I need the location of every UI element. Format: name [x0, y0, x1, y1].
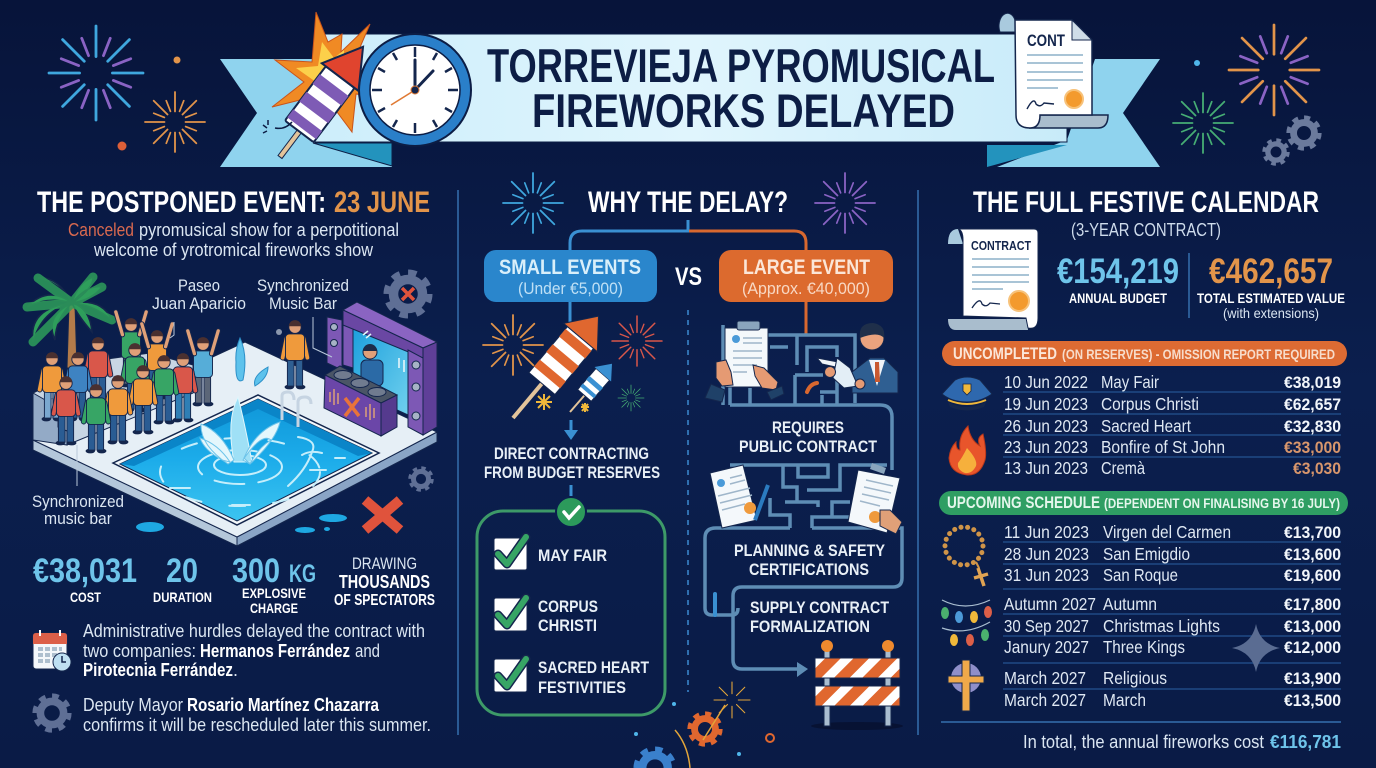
row: sacred heart: 26 Jun 2023 [1004, 416, 1088, 436]
row: san roque: 31 Jun 2023 [1004, 565, 1089, 585]
labels: Juan Aparicio [152, 294, 246, 313]
icon: clipboard with hands [705, 321, 784, 402]
sparkle [1232, 624, 1280, 672]
panel: festive calendar [939, 186, 1348, 752]
row: san roque [1004, 565, 1341, 585]
total line: €116,781 [1270, 732, 1341, 752]
item: corpus christi [494, 597, 598, 635]
row: bonfire: Bonfire of St John [1101, 437, 1225, 457]
icon: police cap [942, 377, 992, 410]
DJ booth [324, 302, 437, 436]
heading: postponed event: THE POSTPONED EVENT: [37, 186, 326, 219]
row: three kings: €12,000 [1284, 638, 1341, 657]
text: administrative hurdles: and [355, 641, 380, 661]
row: corpus christi: Corpus Christi [1101, 394, 1199, 414]
item: may fair [494, 537, 607, 570]
row: christmas lights [1004, 616, 1341, 636]
text: deputy mayor: Rosario Martínez Chazarra [187, 695, 380, 715]
text: supply contract: SUPPLY CONTRACT [750, 598, 890, 617]
row: virgen del carmen: 11 Jun 2023 [1004, 522, 1089, 542]
row: march: €13,500 [1284, 691, 1341, 710]
stats row: 20 [166, 552, 198, 590]
row: autumn [1004, 594, 1341, 614]
subheading: pyromusical show for a perpotitional [139, 220, 399, 240]
banner: upcoming: UPCOMING SCHEDULE [947, 493, 1100, 512]
icon: rosary [945, 527, 988, 586]
row: virgen del carmen: Virgen del Carmen [1103, 522, 1231, 542]
decoration: bottom gears and sparks [634, 682, 774, 768]
item: corpus christi: CHRISTI [538, 616, 597, 635]
singer [276, 320, 307, 389]
icon: contract document: CONTRACT [971, 238, 1031, 253]
row: crema: 13 Jun 2023 [1004, 458, 1088, 478]
table: upcoming schedule [1003, 522, 1341, 710]
row: crema [1004, 458, 1341, 478]
text: requires public contract [739, 418, 878, 456]
item: sacred heart: SACRED HEART [538, 658, 650, 677]
small events box [484, 250, 657, 302]
stat: total value: €462,657 [1209, 252, 1333, 291]
text: planning and safety: CERTIFICATIONS [749, 560, 869, 579]
text: direct contracting [484, 445, 660, 482]
small events box: SMALL EVENTS [499, 256, 641, 279]
row: autumn: Autumn [1103, 594, 1157, 614]
banner: upcoming: (DEPENDENT ON FINALISING BY 16 JULY) [1104, 496, 1340, 511]
row: may fair [1004, 372, 1341, 392]
text: deputy mayor: Deputy Mayor [83, 695, 183, 715]
stats row: OF SPECTATORS [334, 592, 435, 609]
row: autumn: €17,800 [1284, 595, 1341, 614]
heading: why the delay: WHY THE DELAY? [588, 186, 788, 219]
icon: cross [948, 660, 984, 711]
labels: music bar [44, 509, 112, 528]
swimming pool [113, 338, 379, 525]
row: three kings: Janury 2027 [1004, 637, 1089, 657]
stats row: €38,031 [33, 552, 137, 590]
labels: Synchronized [257, 276, 349, 295]
text: direct contracting: DIRECT CONTRACTING [494, 445, 649, 463]
banner: uncompleted: UNCOMPLETED [953, 344, 1057, 363]
text: requires public contract: PUBLIC CONTRACT [739, 437, 878, 456]
row: three kings: Three Kings [1103, 637, 1185, 657]
text: supply contract [750, 598, 890, 636]
large event box: (Approx. €40,000) [742, 279, 870, 298]
item: may fair: MAY FAIR [538, 546, 607, 565]
icon: string lights [941, 600, 992, 646]
row: sacred heart: Sacred Heart [1101, 416, 1191, 436]
crowd [40, 312, 218, 453]
item: sacred heart: FESTIVITIES [538, 678, 626, 697]
icon: road barrier [811, 640, 903, 730]
stepped seating [33, 353, 193, 445]
text: administrative hurdles [83, 621, 425, 680]
large event box: LARGE EVENT [743, 256, 870, 279]
stat: total value [1197, 252, 1345, 321]
stats row: COST [70, 589, 101, 605]
fireworks top right [1173, 25, 1319, 153]
row: christmas lights: 30 Sep 2027 [1004, 616, 1089, 636]
panel: postponed event [27, 186, 437, 735]
icon: contract document [948, 229, 1038, 330]
labels: Music Bar [269, 294, 337, 313]
small events box: (Under €5,000) [518, 279, 623, 298]
text: deputy mayor [83, 695, 431, 735]
pointer lines [77, 317, 332, 486]
text: administrative hurdles: two companies: [83, 641, 196, 661]
row: crema: Cremà [1101, 458, 1145, 478]
row: march: March 2027 [1004, 690, 1086, 710]
arrow down [564, 420, 578, 440]
text: planning and safety: PLANNING & SAFETY [734, 541, 886, 560]
row: virgen del carmen: €13,700 [1284, 523, 1341, 542]
row: march [1004, 690, 1341, 710]
text: administrative hurdles: Administrative hurdles delayed the contract with [83, 621, 425, 641]
row: religious [1004, 668, 1341, 688]
row: sacred heart [1004, 416, 1341, 436]
puddles [136, 514, 347, 533]
row: religious: €13,900 [1284, 669, 1341, 688]
subheading: contract: (3-YEAR CONTRACT) [1071, 220, 1221, 240]
row: may fair: 10 Jun 2022 [1004, 372, 1088, 392]
icon: gear [35, 696, 69, 730]
stats row: CHARGE [250, 600, 298, 616]
stats row: KG [289, 560, 316, 588]
subheading: Canceled [68, 220, 134, 240]
fireworks small events [483, 315, 662, 411]
text: planning and safety [734, 541, 886, 579]
gears top right [1264, 118, 1319, 164]
maze accent [807, 383, 817, 392]
connectors [570, 220, 806, 335]
subheading: welcome of yrotromical fireworks show [93, 240, 374, 260]
stats row: DRAWING [352, 554, 417, 573]
icon: explosion [272, 12, 385, 132]
arrow to barrier [797, 662, 808, 677]
row: bonfire: 23 Jun 2023 [1004, 437, 1088, 457]
panel: why the delay [477, 173, 903, 768]
icon: calendar [33, 630, 71, 671]
icon: signed document [710, 465, 768, 528]
row: crema: €3,030 [1293, 459, 1341, 478]
row: san roque: San Roque [1103, 565, 1178, 585]
icon: stamped clipboard [848, 463, 902, 534]
labels: Paseo [178, 276, 220, 295]
pipe bend marker [713, 594, 717, 615]
icon: flame [949, 426, 986, 475]
palm tree [27, 277, 112, 368]
text: administrative hurdles: Pirotecnia Ferrández [83, 660, 233, 680]
stat: annual budget: €154,219 [1057, 252, 1179, 291]
banner: upcoming [939, 491, 1348, 515]
title text [487, 39, 995, 137]
row: autumn: Autumn 2027 [1004, 594, 1096, 614]
row: san emigdio: €13,600 [1284, 545, 1341, 564]
title banner [220, 34, 1160, 167]
row: religious: Religious [1103, 668, 1167, 688]
row: corpus christi: 19 Jun 2023 [1004, 394, 1088, 414]
row: march: March [1103, 690, 1146, 710]
stats row: THOUSANDS [339, 571, 430, 592]
stats row: DURATION [153, 589, 212, 605]
row: christmas lights: Christmas Lights [1103, 616, 1220, 636]
row: christmas lights: €13,000 [1284, 617, 1341, 636]
row: san emigdio: San Emigdio [1103, 544, 1190, 564]
text: administrative hurdles: Hermanos Ferrández [200, 641, 350, 661]
gear with cross [386, 272, 430, 316]
stats row: EXPLOSIVE [242, 585, 306, 601]
row: bonfire [1004, 437, 1341, 457]
title text: FIREWORKS DELAYED [532, 84, 955, 137]
row: sacred heart: €32,830 [1284, 417, 1341, 436]
title text: TORREVIEJA PYROMUSICAL [487, 39, 995, 92]
icon: clock [359, 34, 471, 146]
row: bonfire: €33,000 [1284, 438, 1341, 457]
row: religious: March 2027 [1004, 668, 1086, 688]
stat: annual budget: ANNUAL BUDGET [1069, 290, 1167, 306]
stat: total value: (with extensions) [1223, 305, 1319, 321]
total line: In total, the annual fireworks cost [1023, 732, 1264, 752]
icon: official [817, 323, 898, 393]
row: virgen del carmen [1004, 522, 1341, 542]
icon: contract banner [999, 13, 1108, 128]
text: direct contracting: FROM BUDGET RESERVES [484, 464, 660, 482]
labels [32, 276, 349, 528]
checklist panel [477, 485, 665, 715]
row: san emigdio: 28 Jun 2023 [1004, 544, 1089, 564]
fireworks beside heading [503, 173, 875, 233]
row: three kings [1004, 637, 1341, 657]
icon: fuse sparks [263, 120, 292, 133]
fireworks top left [49, 26, 205, 152]
text: supply contract: FORMALIZATION [750, 617, 870, 636]
big cross [365, 500, 400, 530]
maze and pipeline [705, 325, 902, 669]
text: deputy mayor: confirms it will be rescheduled later this summer. [83, 715, 431, 735]
stats row: 300 [232, 552, 280, 590]
text: administrative hurdles: . [233, 660, 238, 680]
stat: total value: TOTAL ESTIMATED VALUE [1197, 290, 1345, 306]
item: sacred heart [494, 658, 650, 697]
illustration: pool and stage [27, 272, 437, 546]
rockets [496, 302, 620, 432]
row: corpus christi: €62,657 [1284, 395, 1341, 414]
dashed divider [687, 310, 689, 692]
item: corpus christi: CORPUS [538, 597, 598, 616]
heading: postponed event: 23 JUNE [334, 186, 430, 219]
vs: VS [675, 263, 702, 291]
panel dividers [458, 190, 918, 735]
table: uncompleted events [1003, 372, 1341, 478]
row: san emigdio [1004, 544, 1341, 564]
row: may fair: €38,019 [1284, 373, 1341, 392]
row: corpus christi [1004, 394, 1341, 414]
small gear [410, 468, 432, 490]
subheading [68, 220, 399, 260]
stat: annual budget [1057, 252, 1179, 306]
row: may fair: May Fair [1101, 372, 1159, 392]
labels: Synchronized [32, 492, 124, 511]
text: requires public contract: REQUIRES [772, 418, 844, 437]
icon: contract banner: CONT [1027, 31, 1065, 50]
icon: rocket [262, 33, 381, 171]
large event box [719, 250, 893, 302]
banner: uncompleted [942, 341, 1347, 366]
stats row [33, 552, 435, 616]
row: san roque: €19,600 [1284, 566, 1341, 585]
